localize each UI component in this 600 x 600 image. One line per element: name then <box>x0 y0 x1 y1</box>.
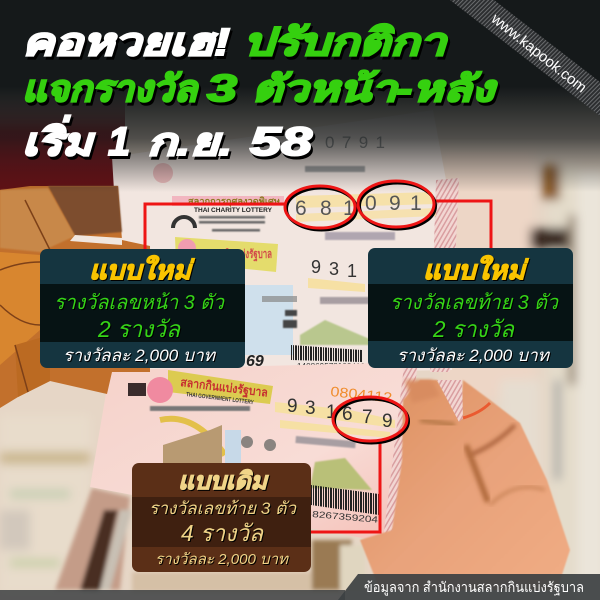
prize amount: รางวัลละ 2,000 บาท <box>63 346 217 365</box>
back lottery ticket: 0791 <box>325 133 385 152</box>
title: ปรับกติกา <box>243 22 448 64</box>
ticket serial number: 8267359204 <box>312 509 378 525</box>
title: เริ่ม <box>22 115 96 164</box>
corner ribbon with website <box>450 0 600 116</box>
government lottery heading: สลากกินแบ่งรัฐบาล <box>180 375 269 401</box>
prize description: รางวัลเลขท้าย 3 ตัว <box>149 499 297 518</box>
red circles on numbers <box>285 181 436 443</box>
title: คอหวยเฮ! <box>22 22 230 64</box>
title: 1 <box>108 120 130 164</box>
prize amount: รางวัลละ 2,000 บาท <box>155 551 289 568</box>
number fragment 69: 69 <box>246 353 264 370</box>
charity lottery english: THAI CHARITY LOTTERY <box>194 208 272 214</box>
title <box>22 22 498 164</box>
prize count: 2 รางวัล <box>432 316 515 342</box>
panel: old format last three digits <box>132 463 311 572</box>
top dark gradient overlay <box>0 0 600 192</box>
title: ก.ย. <box>147 122 232 164</box>
ticket number 091: 091 <box>365 192 422 215</box>
ticket name: สลากกินแบ่งรัฐบาล <box>206 247 272 262</box>
ticket orange number: 0804112 <box>330 383 393 405</box>
prize count: 2 รางวัล <box>97 316 181 342</box>
left hand <box>0 186 150 408</box>
ticket number 931: 931 <box>287 396 337 423</box>
back lottery ticket <box>112 110 459 375</box>
ticket number 679: 679 <box>342 404 393 432</box>
title: 58 <box>250 120 313 164</box>
bottom source bar <box>0 574 600 600</box>
title: 3 <box>207 68 237 110</box>
panel: new format front three digits <box>40 249 245 368</box>
panel heading: แบบใหม่ <box>89 255 195 285</box>
source credit: ข้อมูลจาก สำนักงานสลากกินแบ่งรัฐบาล <box>364 579 584 596</box>
title: ตัวหน้า-หลัง <box>252 68 498 109</box>
red callout lines <box>145 201 491 532</box>
prize description: รางวัลเลขหน้า 3 ตัว <box>54 292 226 314</box>
ticket serial number: 140869578102410 <box>297 362 366 371</box>
charity lottery heading: สลากการกุศลงวดพิเศษ <box>188 196 280 207</box>
website address: www.kapook.com <box>487 10 590 96</box>
prize description: รางวัลเลขท้าย 3 ตัว <box>390 292 560 314</box>
back lottery ticket: 931 <box>311 257 357 281</box>
government lottery english: THAI GOVERNMENT LOTTERY <box>186 392 254 406</box>
panel heading: แบบใหม่ <box>423 255 529 285</box>
panel heading: แบบเดิม <box>178 468 269 495</box>
title: แจกรางวัล <box>22 68 199 109</box>
front lottery ticket <box>90 362 418 544</box>
right hand <box>360 380 570 590</box>
prize count: 4 รางวัล <box>181 520 264 546</box>
prize amount: รางวัลละ 2,000 บาท <box>397 346 551 365</box>
ticket number 681: 681 <box>295 197 355 220</box>
panel: new format last three digits <box>368 248 573 368</box>
